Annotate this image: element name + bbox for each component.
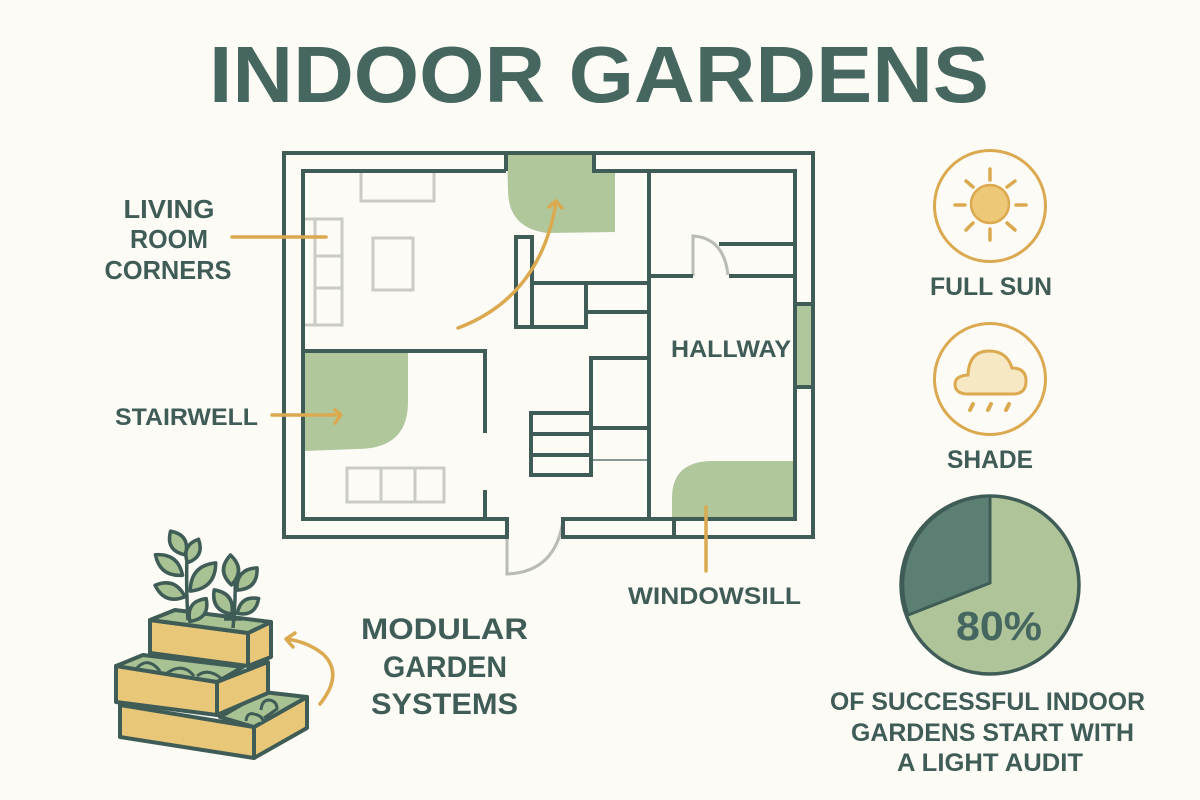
label: modular garden systems: SYSTEMS: [371, 688, 518, 721]
label: modular garden systems: GARDEN: [383, 651, 507, 684]
plant: left: [151, 527, 222, 626]
label: modular garden systems: MODULAR: [361, 613, 528, 646]
label: full sun: FULL SUN: [930, 273, 1052, 301]
label: living room corners: [104, 194, 232, 285]
text block: light audit caption: A LIGHT AUDIT: [897, 749, 1083, 777]
walls: [284, 153, 813, 537]
text block: light audit caption: OF SUCCESSFUL INDOOR: [830, 688, 1145, 716]
bottom planter: [120, 692, 307, 758]
icon: shade cloud: [934, 324, 1046, 434]
green zone: right window: [796, 305, 812, 387]
green zone: upper doorway planting: [507, 154, 615, 233]
label: living room corners: LIVING: [124, 194, 214, 224]
label: shade: SHADE: [947, 446, 1033, 474]
top planter: [150, 610, 271, 666]
green zone: stairwell corner: [304, 353, 408, 451]
label: living room corners: CORNERS: [104, 255, 232, 285]
label: windowsill: WINDOWSILL: [628, 583, 801, 610]
icon: full sun: [934, 150, 1046, 262]
label: stairwell: STAIRWELL: [115, 404, 258, 431]
arrow: to upper planting: [458, 201, 562, 328]
label: living room corners: ROOM: [130, 224, 208, 254]
label: hallway: HALLWAY: [671, 336, 791, 363]
label: modular garden systems: [361, 613, 528, 721]
text block: light audit caption: [830, 688, 1145, 777]
arrow: planter: [286, 633, 333, 704]
arrow: living room corners: [232, 235, 326, 239]
green zone: windowsill: [672, 461, 793, 518]
arrow: stairwell: [272, 410, 341, 423]
pie chart: 80%: [901, 496, 1079, 674]
pie chart: 80%: 80%: [956, 603, 1042, 649]
text block: light audit caption: GARDENS START WITH: [851, 719, 1134, 747]
furniture outlines: [305, 172, 444, 502]
middle planter: [116, 655, 268, 715]
icon: modular planter: [116, 527, 307, 758]
panel: floor plan: [284, 153, 813, 574]
arrow: windowsill: [704, 507, 708, 571]
title: INDOOR GARDENS: [209, 30, 989, 119]
plant: right: [208, 555, 263, 628]
doors: [507, 236, 728, 574]
